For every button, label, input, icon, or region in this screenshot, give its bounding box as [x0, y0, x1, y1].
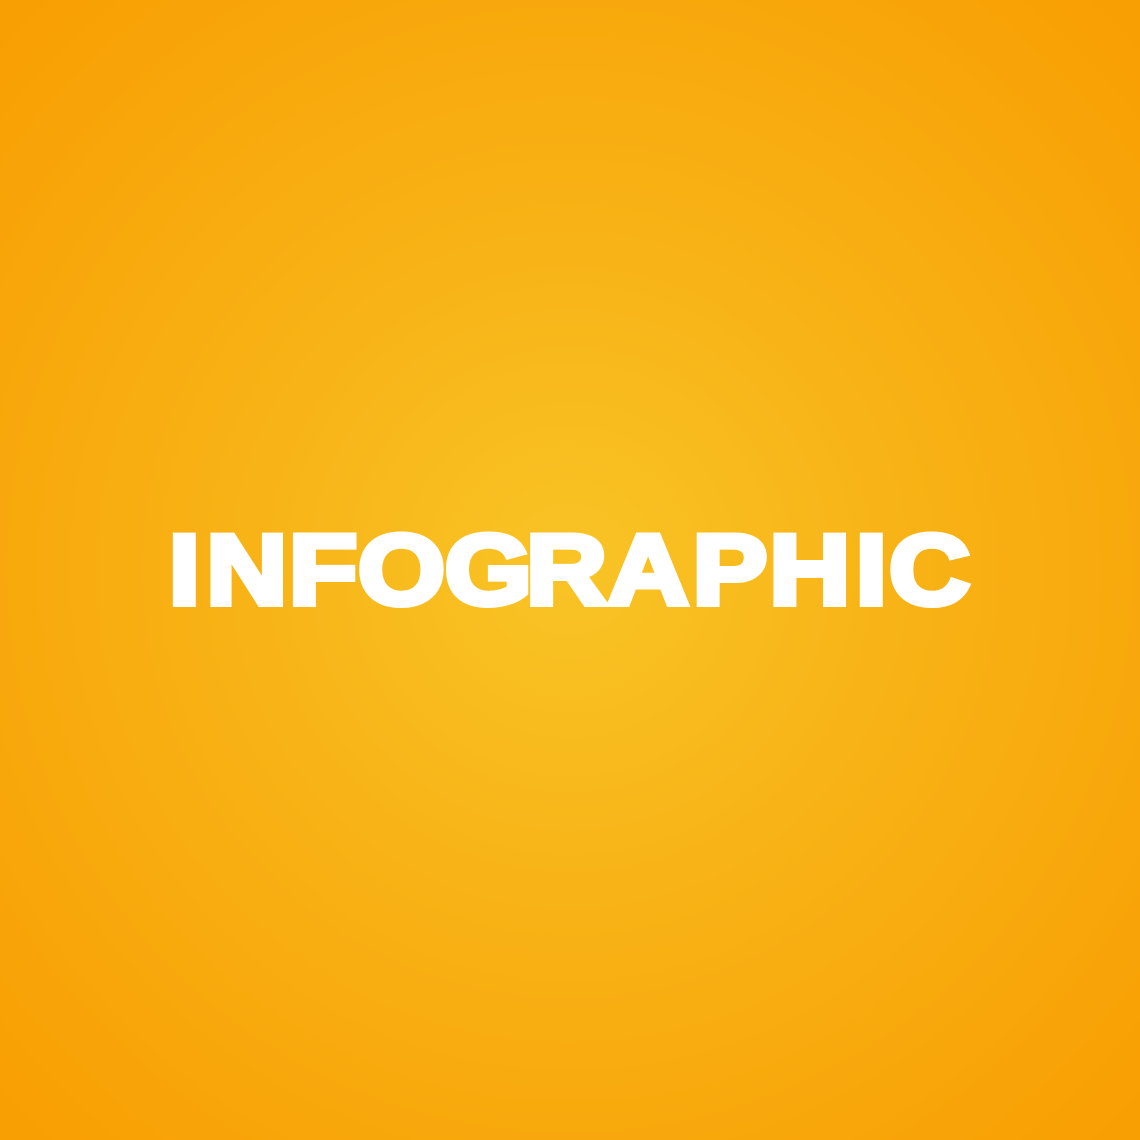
title: INFOGRAPHIC	[169, 515, 970, 626]
